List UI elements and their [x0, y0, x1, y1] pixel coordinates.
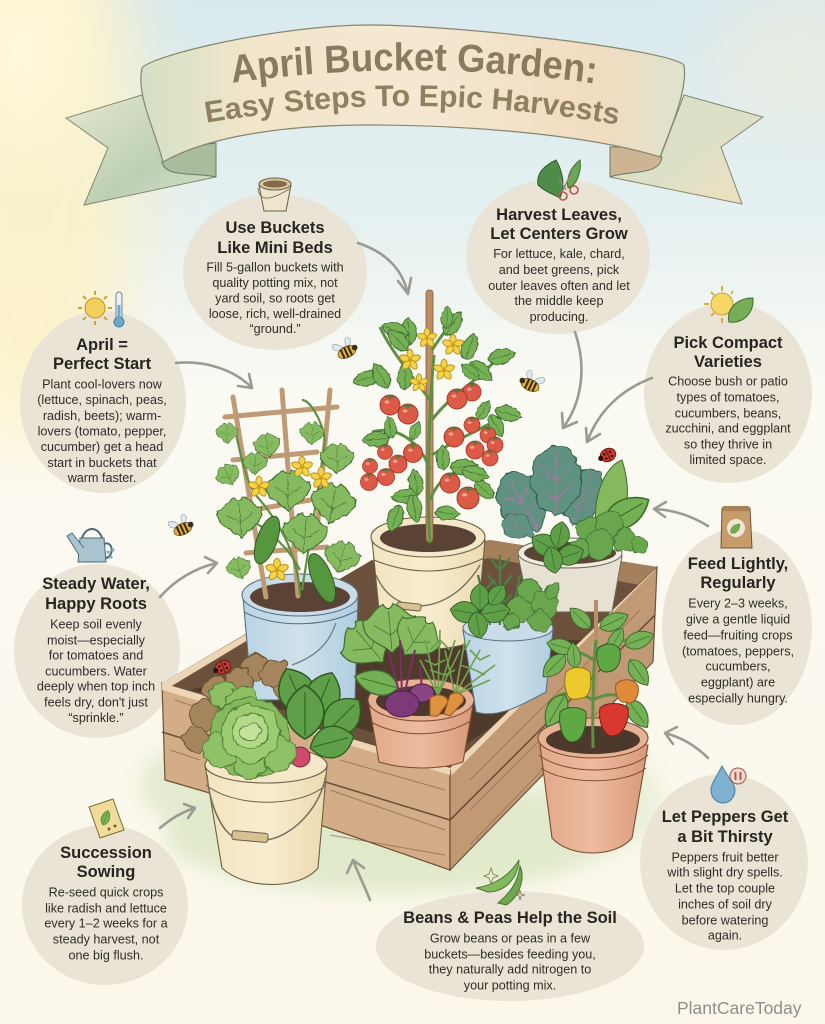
- text: Beans and Peas: they naturally add nitrogen to: [429, 962, 591, 976]
- text: Succession Sowing: Re-seed quick crops: [49, 886, 163, 900]
- bed soil: [190, 640, 620, 755]
- bucket: front cream bucket: [205, 747, 327, 884]
- parsley clump: [570, 511, 648, 560]
- butterhead lettuce: [204, 698, 295, 779]
- text: Steady Water: deeply when top inch: [37, 680, 155, 694]
- icon: water drop and pause: [711, 766, 746, 803]
- arrow: beans to bed: [347, 860, 370, 900]
- text: April: April =: [76, 336, 128, 354]
- bucket: large terracotta pepper bucket: [538, 718, 648, 853]
- text: Steady Water: moist—especially: [47, 634, 146, 648]
- text: Let Peppers: a Bit Thirsty: [677, 828, 773, 846]
- bed left front panel: [162, 683, 450, 870]
- bucket: kale pot: [518, 538, 622, 612]
- text: Pick Compact: cucumbers, beans,: [675, 406, 781, 420]
- text: Pick Compact: [665, 334, 791, 467]
- title banner: [65, 24, 764, 206]
- text: Succession Sowing: steady harvest, not: [53, 932, 160, 946]
- text: Feed Lightly: [682, 555, 794, 706]
- plant: lettuce and spinach: [184, 654, 371, 779]
- text: Harvest Leaves: the middle keep: [515, 294, 603, 308]
- text: Use Buckets: [206, 219, 344, 336]
- text: Harvest Leaves: Harvest Leaves,: [496, 206, 622, 224]
- text: Use Buckets: Fill 5-gallon buckets with: [206, 260, 344, 274]
- basil: [527, 528, 563, 562]
- bucket: terracotta root bucket: [368, 679, 474, 768]
- text: Feed Lightly: Every 2–3 weeks,: [688, 596, 788, 610]
- parsley: [501, 579, 561, 633]
- icon: sun and leaf: [704, 286, 753, 323]
- text: Feed Lightly: feed—fruiting crops: [683, 628, 793, 642]
- plant: beets and carrots: [331, 602, 495, 717]
- text: Pick Compact: Pick Compact: [673, 334, 783, 352]
- text: Use Buckets: Like Mini Beds: [217, 239, 333, 257]
- text: Let Peppers: Let Peppers Get: [662, 808, 789, 826]
- bees: [167, 335, 546, 539]
- arrow: peppers: [665, 727, 708, 758]
- text: Pick Compact: Choose bush or patio: [668, 374, 788, 388]
- text: Feed Lightly: Regularly: [700, 574, 776, 592]
- arrow: water to cucumber: [160, 557, 217, 597]
- plant: herbs: [448, 555, 561, 640]
- text: Succession Sowing: Succession: [60, 844, 152, 862]
- text: Let Peppers: Peppers fruit better: [671, 850, 779, 864]
- ladybug: [211, 658, 233, 677]
- bubble panels: [14, 178, 812, 1001]
- text: Steady Water: for tomatoes and: [49, 648, 143, 662]
- basil leaves: [471, 584, 489, 610]
- arrow: buckets to tomato: [358, 243, 411, 294]
- text: Succession Sowing: Sowing: [77, 863, 135, 881]
- text: April: [37, 336, 167, 485]
- rosemary: [472, 555, 520, 625]
- text: Steady Water: Steady Water,: [42, 575, 150, 593]
- pepper leaves: [565, 603, 595, 633]
- text: Beans and Peas: your potting mix.: [464, 978, 556, 992]
- text: April: Perfect Start: [53, 355, 152, 373]
- text: Harvest Leaves: outer leaves often and let: [488, 279, 630, 293]
- arrow: compact to kale: [586, 378, 652, 442]
- bucket: cream tomato bucket: [371, 517, 485, 649]
- beet leaves: [331, 608, 404, 679]
- text: April: (lettuce, spinach, peas,: [37, 393, 167, 407]
- text: Succession Sowing: every 1–2 weeks for a: [44, 916, 168, 930]
- bed rim: [162, 567, 657, 775]
- text: Harvest Leaves: Let Centers Grow: [490, 225, 628, 243]
- arrows: [160, 243, 708, 900]
- beetroots: [410, 684, 434, 702]
- bed interior: [162, 540, 657, 768]
- text: Steady Water: Keep soil evenly: [50, 618, 143, 632]
- right ribbon tail: [610, 95, 763, 204]
- icon: pea pods: [476, 860, 525, 905]
- text: Feed Lightly: eggplant) are: [701, 676, 775, 690]
- radish: [290, 747, 310, 767]
- text: Let Peppers: Let the top couple: [675, 882, 775, 896]
- text: Steady Water: feels dry, don't just: [44, 696, 148, 710]
- text: Harvest Leaves: [488, 206, 630, 324]
- text: Pick Compact: zucchini, and eggplant: [665, 422, 791, 436]
- pepper fruit: [565, 668, 591, 699]
- tomato fruit: [380, 395, 400, 415]
- text: April: warm faster.: [67, 471, 136, 485]
- icon: leaves and scissors: [538, 160, 580, 200]
- text: Pick Compact: Varieties: [694, 353, 762, 371]
- plant: cucumber on trellis: [212, 390, 363, 606]
- icon: seed packet: [89, 799, 124, 838]
- bucket: blue cucumber bucket: [242, 574, 358, 700]
- arrow: succession to lettuce: [160, 804, 195, 828]
- icon: bucket: [258, 178, 291, 211]
- raised wooden bed: [162, 540, 657, 870]
- text: Steady Water: cucumbers. Water: [45, 664, 147, 678]
- ladybug: [596, 446, 618, 465]
- plant: pepper: [537, 600, 657, 748]
- subtitle text: Easy Steps To Epic Harvests: [205, 85, 618, 124]
- red leaf lettuce: [184, 654, 296, 753]
- text: Pick Compact: types of tomatoes,: [677, 390, 779, 404]
- plant: kale and chard: [486, 445, 655, 575]
- trellis: [225, 390, 337, 597]
- bucket: small blue herb bucket: [463, 615, 553, 714]
- carrot tops: [420, 630, 495, 695]
- text: Harvest Leaves: producing.: [530, 310, 588, 324]
- spinach leaves: [270, 661, 324, 723]
- text: Pick Compact: so they thrive in: [684, 438, 772, 452]
- text: Let Peppers: again.: [708, 928, 742, 942]
- cucumber vines: [235, 400, 325, 595]
- tomato stems: [372, 315, 505, 543]
- cucumber fruit: [249, 513, 285, 567]
- text: Harvest Leaves: and beet greens, pick: [499, 263, 620, 277]
- text: April: start in buckets that: [47, 456, 157, 470]
- text: Feed Lightly: give a gentle liquid: [686, 612, 790, 626]
- text: Use Buckets: “ground.”: [249, 322, 301, 336]
- plant: tomato: [351, 290, 524, 543]
- text: Feed Lightly: Feed Lightly,: [688, 555, 788, 573]
- text: Beans and Peas: buckets—besides feeding you,: [424, 948, 596, 962]
- arrow: harvest to kale: [562, 332, 581, 428]
- ground wash: [140, 745, 660, 893]
- text: April: Plant cool-lovers now: [42, 378, 163, 392]
- ribbon main body: [141, 25, 685, 162]
- text: Steady Water: “sprinkle.”: [68, 711, 124, 725]
- text: Pick Compact: limited space.: [690, 453, 766, 467]
- text: April: lovers (tomato, pepper,: [38, 424, 166, 438]
- arrow: feed to kale: [654, 502, 708, 526]
- text: Let Peppers: before watering: [682, 914, 768, 928]
- ribbon fold shadows: [162, 143, 216, 177]
- cucumber leaves: [212, 422, 363, 582]
- text: Use Buckets: Use Buckets: [225, 219, 325, 237]
- text: Let Peppers: [662, 808, 789, 942]
- cucumber flowers: [291, 456, 313, 478]
- icon: sun and thermometer: [78, 291, 124, 327]
- text: Feed Lightly: especially hungry.: [688, 692, 788, 706]
- pepper stake: [594, 600, 598, 700]
- tomato flowers: [416, 328, 438, 348]
- text: Use Buckets: yard soil, so roots get: [215, 292, 335, 306]
- text: Use Buckets: loose, rich, well-drained: [209, 307, 341, 321]
- text: Succession Sowing: one big flush.: [69, 948, 143, 962]
- text: Succession Sowing: [44, 844, 168, 962]
- light lettuce: [210, 680, 258, 718]
- text: Let Peppers: with slight dry spells.: [666, 866, 783, 880]
- icon: fertilizer bag: [721, 506, 752, 548]
- text: Steady Water: Happy Roots: [45, 595, 147, 613]
- text: Steady Water: [37, 575, 155, 725]
- text: Use Buckets: quality potting mix, not: [212, 276, 338, 290]
- arrow: April to cucumber: [176, 362, 252, 388]
- tomato stake: [426, 290, 433, 542]
- tomato leaves: [351, 305, 524, 534]
- text: Succession Sowing: like radish and lettuce: [45, 902, 167, 916]
- bed right front panel: [450, 567, 657, 870]
- pepper stems: [548, 640, 640, 748]
- text: Harvest Leaves: For lettuce, kale, chard,: [493, 247, 625, 261]
- text: Beans and Peas: [403, 909, 617, 992]
- text: April: radish, beets); warm-: [43, 409, 161, 423]
- text: Beans and Peas: Grow beans or peas in a few: [430, 932, 591, 946]
- text: Feed Lightly: (tomatoes, peppers,: [682, 644, 794, 658]
- text: Beans and Peas: Beans & Peas Help the Soil: [403, 909, 617, 927]
- left ribbon tail: [66, 95, 216, 205]
- text: April: cucumber) get a head: [41, 440, 163, 454]
- text: Feed Lightly: cucumbers,: [705, 660, 771, 674]
- text: Let Peppers: inches of soil dry: [678, 898, 773, 912]
- title text: April Bucket Garden:: [233, 42, 595, 88]
- carrots: [430, 695, 448, 716]
- watermark: PlantCareToday: [677, 998, 802, 1018]
- icon: watering can: [67, 529, 115, 562]
